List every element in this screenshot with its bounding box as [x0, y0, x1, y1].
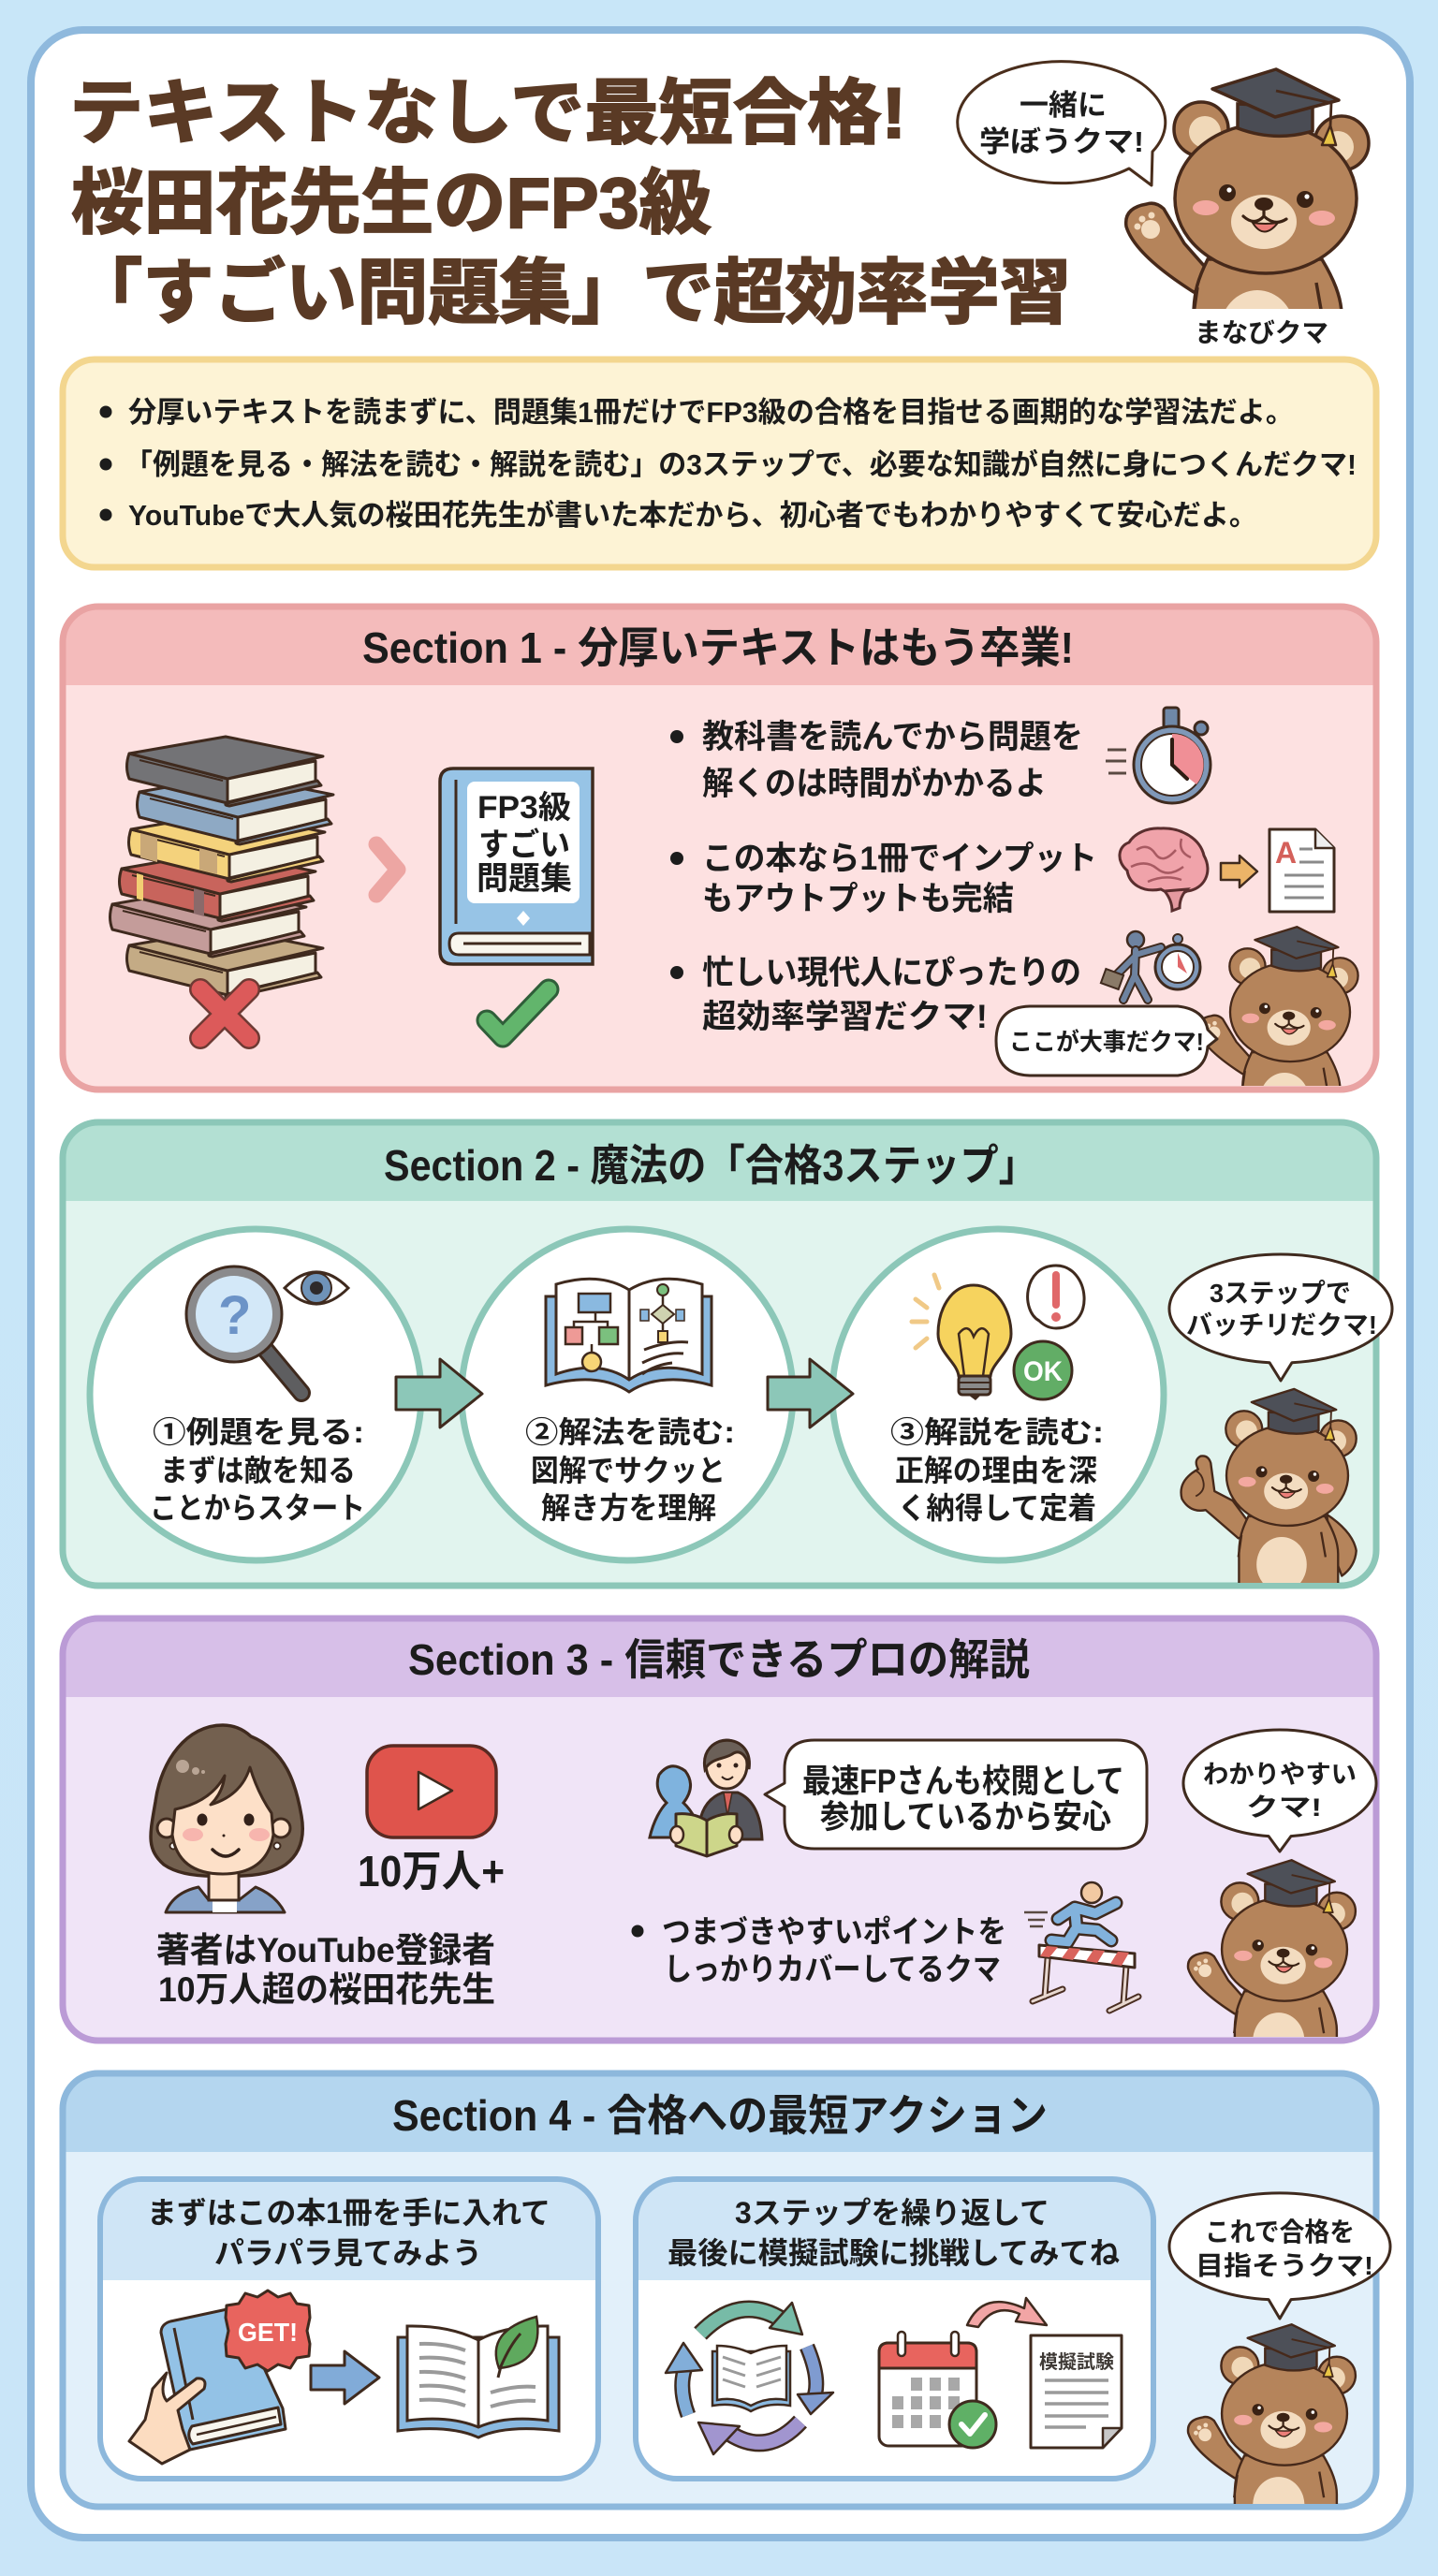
text: bullet 3: [670, 955, 1081, 1035]
speech bubble: section 4: [1169, 2193, 1390, 2319]
icon: video play button: [367, 1746, 496, 1837]
bear mascot: section 3: [1187, 1859, 1357, 2037]
summary box: 分厚いテキストを読まずに、問題集1冊だけでFP3級の合格を目指せる画期的な学習法だよ。: [128, 396, 1294, 429]
text: stumbling points: [631, 1914, 1006, 1986]
bear mascot: section 4: [1187, 2323, 1357, 2504]
icon: green check: [487, 989, 549, 1037]
card: repeat and mock exam: [636, 2179, 1153, 2479]
icon: eye: [285, 1272, 348, 1304]
header speech bubble: [958, 62, 1166, 185]
icon: light bulb: [912, 1275, 1011, 1400]
text: step 3: [890, 1415, 1104, 1525]
speech bubble: section 3: クマ!: [1246, 1793, 1322, 1822]
icon: OK badge: [1014, 1341, 1072, 1399]
icon: OK badge: OK: [1023, 1356, 1063, 1387]
text: step 2: 解き方を理解: [541, 1491, 716, 1525]
panel: section 4: [63, 2073, 1390, 2534]
title: 桜田花先生のFP3級: [71, 164, 712, 243]
icon: hurdle runner: [1024, 1882, 1138, 2011]
step 2 circle: [462, 1229, 793, 1560]
text: step 3: 正解の理由を深: [895, 1454, 1097, 1487]
text: card 2: 最後に模擬試験に挑戦してみてね: [668, 2236, 1120, 2270]
text: bullet 3: 超効率学習だクマ!: [702, 999, 988, 1035]
stat: subscribers: 10万人+: [358, 1847, 505, 1895]
icon: stack of books: [110, 737, 333, 998]
header bear mascot: [1123, 67, 1371, 309]
arrow: book to reading: [311, 2351, 379, 2404]
icon: open book with leaf: [398, 2317, 559, 2437]
title: [69, 74, 1071, 333]
icon: GET badge: [226, 2291, 310, 2371]
heading: section 2: Section 2 - 魔法の「合格3ステップ」: [384, 1141, 1037, 1190]
arrow: calendar to exam: [967, 2298, 1047, 2327]
icon: magnifier: [186, 1266, 301, 1393]
panel: section 3: [63, 1618, 1376, 2070]
icon: GET badge: GET!: [238, 2318, 298, 2347]
title: テキストなしで最短合格!: [69, 74, 906, 154]
icon: test document: [1269, 829, 1334, 912]
text: card 1: まずはこの本1冊を手に入れて: [147, 2196, 550, 2230]
text: step 1: まずは敵を知る: [160, 1454, 356, 1487]
speech bubble: section 2: 3ステップで: [1210, 1279, 1351, 1308]
icon: magnifier: ?: [218, 1285, 251, 1346]
icon: chevron: [376, 844, 398, 895]
header speech bubble: 一緒に: [1020, 89, 1107, 122]
icon: open book with flowchart: [546, 1279, 712, 1392]
speech bubble: section 3: [1183, 1730, 1376, 1852]
text: author caption: 著者はYouTube登録者: [156, 1931, 495, 1969]
bear mascot: section 1: [1204, 926, 1359, 1086]
text: author caption: 10万人超の桜田花先生: [158, 1970, 495, 2009]
text: card 1: [147, 2196, 550, 2270]
arrow: brain to document: [1221, 856, 1257, 887]
icon: reader with colleague: [650, 1740, 762, 1856]
text: bullet 1: 解くのは時間がかかるよ: [702, 766, 1047, 802]
speech bubble: section 2: [1169, 1254, 1392, 1381]
bear mascot: section 2: [1181, 1389, 1357, 1592]
step 1 circle: [90, 1229, 421, 1560]
icon: FP3 problem book: 問題集: [477, 861, 572, 897]
summary box: YouTubeで大人気の桜田花先生が書いた本だから、初心者でもわかりやすくて安心だよ。: [128, 499, 1257, 532]
arrow: step 2 to 3: [768, 1359, 853, 1427]
text: card 1: パラパラ見てみよう: [214, 2236, 482, 2270]
text: card 2: 3ステップを繰り返して: [735, 2196, 1049, 2230]
text: bullet 3: 忙しい現代人にぴったりの: [702, 955, 1081, 991]
summary box: [63, 359, 1376, 567]
icon: FP3 problem book: FP3級: [477, 790, 571, 826]
speech bubble: section 4: 目指そうクマ!: [1196, 2251, 1373, 2280]
card: get the book: [100, 2179, 598, 2479]
mascot name label: まなびクマ: [1195, 318, 1328, 347]
text: bullet 2: もアウトプットも完結: [702, 881, 1014, 917]
icon: FP3 problem book: [440, 768, 593, 964]
speech bubble: section 2: バッチリだクマ!: [1186, 1310, 1377, 1339]
heading: section 3: Section 3 - 信頼できるプロの解説: [408, 1635, 1030, 1684]
text: bullet 2: この本なら1冊でインプット: [702, 841, 1097, 877]
text: step 1: ①例題を見る:: [153, 1415, 364, 1449]
step 3 circle: [832, 1229, 1164, 1560]
text: card 2: [668, 2196, 1120, 2270]
speech bubble: section 1: ここが大事だクマ!: [1009, 1028, 1204, 1056]
text: step 3: く納得して定着: [898, 1491, 1096, 1525]
icon: test document: A: [1275, 836, 1297, 870]
text: bullet 1: [670, 719, 1083, 802]
text: step 2: ②解法を読む:: [525, 1415, 735, 1449]
icon: calendar with check: [879, 2332, 996, 2448]
text: bullet 2: [670, 841, 1097, 917]
title: 「すごい問題集」で超効率学習: [71, 254, 1071, 333]
heading: section 1: Section 1 - 分厚いテキストはもう卒業!: [362, 623, 1074, 672]
heading: section 4: Section 4 - 合格への最短アクション: [392, 2091, 1048, 2140]
text: stumbling points: しっかりカバーしてるクマ: [664, 1952, 1001, 1986]
text: step 3: ③解説を読む:: [890, 1415, 1104, 1449]
icon: FP3 problem book: すごい: [478, 827, 570, 863]
callout: proofreader: [765, 1740, 1147, 1849]
speech bubble: section 4: これで合格を: [1205, 2217, 1355, 2247]
arrow: step 1 to 2: [396, 1359, 482, 1427]
panel: section 1: [63, 607, 1376, 1127]
text: step 2: 図解でサクッと: [531, 1454, 726, 1487]
icon: stopwatch: [1106, 708, 1211, 803]
icon: hand holding book: [129, 2307, 286, 2464]
icon: busy person with clock: [1101, 931, 1200, 1000]
speech bubble: section 3: わかりやすい: [1203, 1761, 1357, 1789]
header speech bubble: 学ぼうクマ!: [979, 125, 1144, 158]
text: step 2: [525, 1415, 735, 1525]
text: step 1: [150, 1415, 365, 1525]
icon: red cross: [200, 989, 249, 1038]
icon: repeat cycle: [666, 2303, 833, 2454]
text: stumbling points: つまづきやすいポイントを: [662, 1914, 1006, 1949]
icon: brain: [1120, 828, 1208, 911]
icon: mock exam sheet: 模擬試験: [1039, 2351, 1114, 2373]
summary box: 「例題を見る・解法を読む・解説を読む」の3ステップで、必要な知識が自然に身につくんだクマ!: [125, 448, 1357, 481]
text: bullet 1: 教科書を読んでから問題を: [702, 719, 1083, 755]
callout: proofreader: 参加しているから安心: [820, 1799, 1111, 1836]
icon: mock exam sheet: [1031, 2335, 1122, 2448]
callout: proofreader: 最速FPさんも校閲として: [802, 1764, 1124, 1800]
speech bubble: section 1: [996, 1006, 1217, 1076]
text: author caption: [156, 1931, 495, 2009]
panel: section 2: [63, 1122, 1392, 1592]
text: step 1: ことからスタート: [150, 1491, 365, 1525]
icon: exclamation bubble: [1028, 1266, 1084, 1328]
icon: author portrait: [151, 1725, 302, 1912]
